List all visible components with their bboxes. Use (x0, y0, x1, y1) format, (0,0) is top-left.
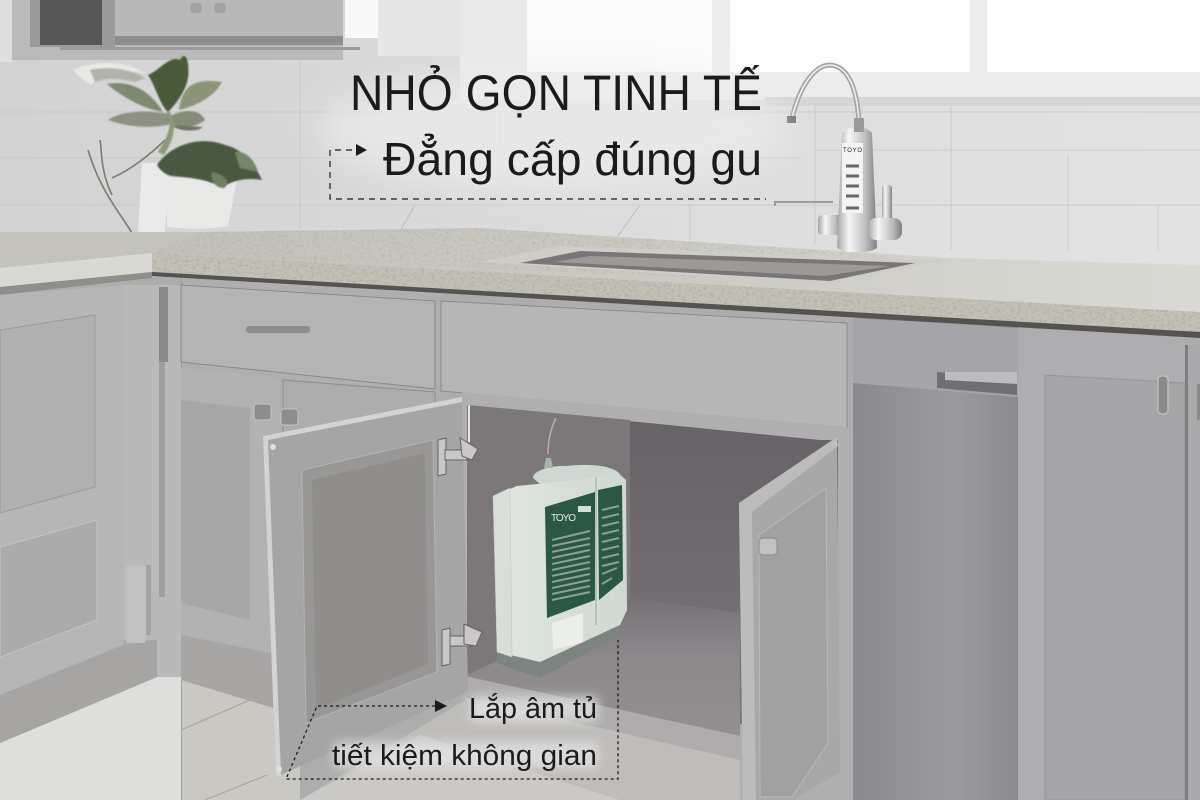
title: NHỎ GỌN TINH TẾ (350, 64, 762, 121)
arrow: dashed connector to faucet (330, 144, 766, 199)
left corner cabinet (0, 275, 182, 800)
undermount sink (480, 246, 945, 284)
left side face (493, 488, 512, 657)
countertop (0, 228, 1200, 338)
dishwasher (853, 318, 1018, 800)
base cabinets background (0, 270, 1200, 800)
install note block (332, 692, 598, 772)
drawer handle (246, 326, 310, 333)
background: kitchen wall (0, 0, 1200, 300)
marble wall tile lines (0, 60, 1200, 250)
top drawer above the opening (441, 301, 847, 428)
faucet display panel: TOYO (843, 148, 862, 154)
dry twigs (88, 140, 165, 233)
open left door (263, 397, 468, 777)
grey base (497, 600, 627, 678)
potted plant (73, 56, 262, 233)
counter front edge (152, 253, 1200, 332)
open right door (739, 437, 840, 800)
green side label (598, 485, 623, 600)
plant leaves (73, 56, 262, 188)
top cap (533, 465, 626, 484)
green front label (545, 492, 595, 618)
knobs (254, 404, 298, 425)
faucet display panel (842, 143, 863, 213)
note glow (334, 696, 598, 768)
green front label: TOYO (551, 513, 576, 524)
faucet side tube (775, 202, 833, 206)
left counter (0, 232, 200, 268)
note line 1: Lắp âm tủ (469, 692, 597, 725)
faucet right knob (868, 218, 902, 240)
faucet (775, 65, 902, 252)
upper door panel (0, 315, 95, 513)
main shell (493, 472, 627, 662)
open cabinet interior (462, 392, 852, 800)
floor (0, 677, 300, 800)
hinges (438, 438, 482, 666)
cabinet floor shelf (300, 598, 740, 800)
faucet spout (792, 65, 859, 122)
lower doors (181, 368, 280, 655)
divider seam (595, 478, 597, 625)
faucet handle (882, 185, 892, 223)
faucet body (837, 127, 877, 252)
toe kick (0, 640, 157, 743)
title glow (320, 68, 790, 192)
note line 2: tiết kiệm không gian (332, 740, 597, 772)
cabinet left of the opening (181, 272, 440, 710)
window above the sink (345, 0, 1200, 106)
water tube (548, 418, 556, 454)
white pots (138, 163, 237, 233)
warning sticker (552, 613, 583, 650)
water ionizer machine (493, 458, 627, 678)
toe kick (181, 635, 280, 710)
right cabinet (1020, 334, 1200, 800)
cabinet door (0, 285, 123, 695)
lower door panel (0, 520, 97, 657)
corner filler post (123, 285, 181, 677)
counter top surface (152, 228, 1200, 312)
drawer (181, 285, 435, 389)
door panel (759, 488, 828, 797)
shadow line (152, 272, 1200, 338)
subtitle: Đẳng cấp đúng gu (383, 133, 762, 185)
title block (320, 64, 790, 192)
upper cabinet (0, 0, 360, 62)
faucet left knob (818, 215, 842, 235)
arrow: dashed connector to machine (286, 640, 618, 779)
door edge highlight (739, 437, 838, 800)
door knob (759, 538, 777, 555)
